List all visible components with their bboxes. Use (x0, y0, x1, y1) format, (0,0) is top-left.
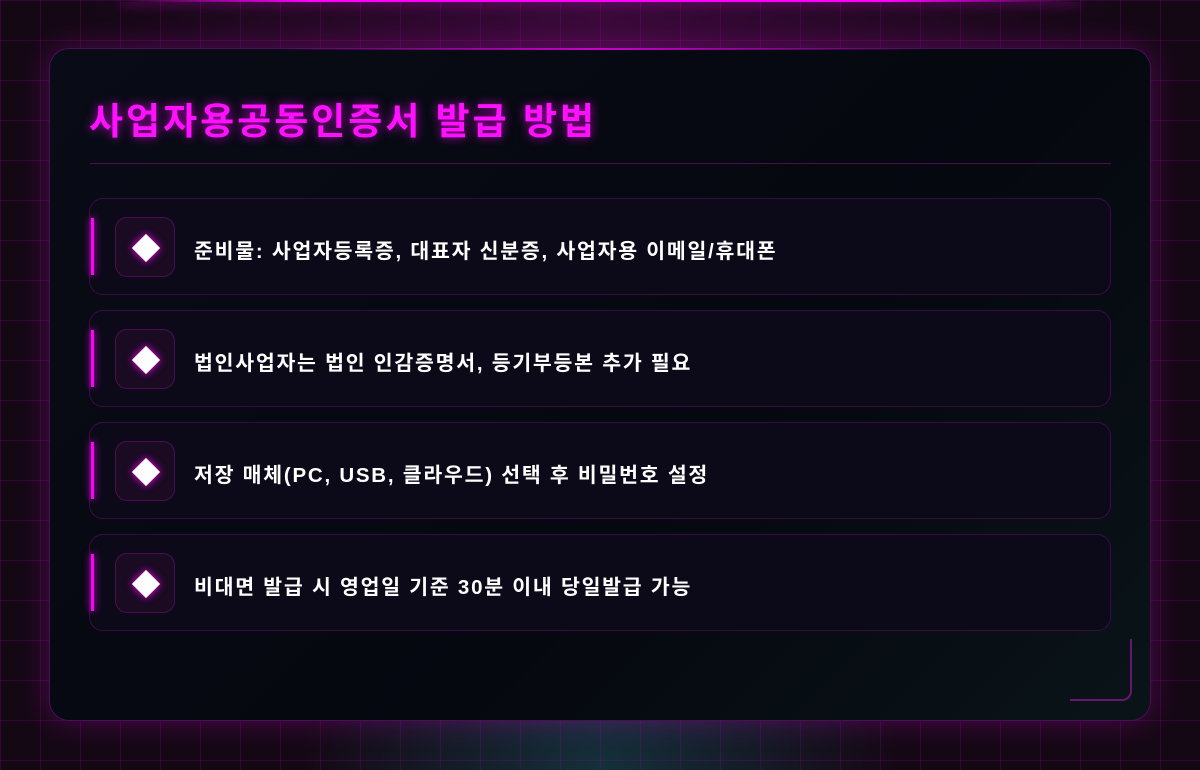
icon: diamond (115, 553, 175, 613)
corner bracket (1070, 639, 1132, 701)
icon: diamond (115, 217, 175, 277)
item 4 (89, 534, 1111, 631)
item 3 (89, 422, 1111, 519)
text 3: 저장 매체(PC, USB, 클라우드) 선택 후 비밀번호 설정 (194, 464, 709, 487)
icon: diamond (115, 441, 175, 501)
title: 사업자용공동인증서 발급 방법 (89, 101, 597, 142)
text 4: 비대면 발급 시 영업일 기준 30분 이내 당일발급 가능 (194, 576, 692, 599)
item 1 (89, 198, 1111, 295)
text 2: 법인사업자는 법인 인감증명서, 등기부등본 추가 필요 (194, 352, 692, 375)
item 2 (89, 310, 1111, 407)
icon: diamond (115, 329, 175, 389)
text 1: 준비물: 사업자등록증, 대표자 신분증, 사업자용 이메일/휴대폰 (194, 240, 777, 263)
